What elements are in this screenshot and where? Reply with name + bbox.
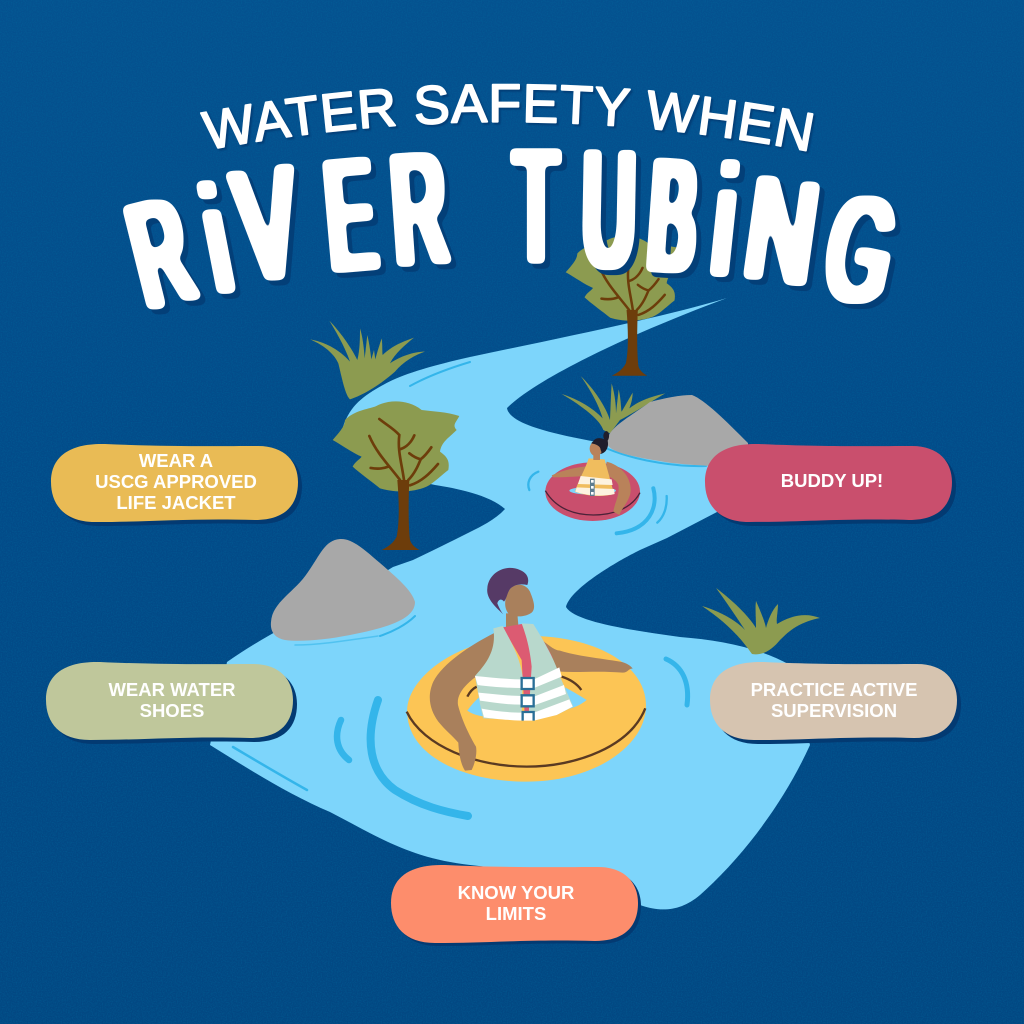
callout: wear a life jacket: USCG APPROVED bbox=[95, 471, 257, 492]
near arm bbox=[430, 633, 495, 771]
ripples around small tuber bbox=[528, 472, 667, 533]
title: river tubing: i bbox=[191, 155, 242, 324]
callout: practice active supervision: SUPERVISION bbox=[771, 700, 897, 721]
grass: upper left bbox=[310, 321, 425, 399]
callout: know your limits: LIMITS bbox=[486, 903, 546, 924]
callout: buddy up bbox=[705, 444, 956, 526]
grass: right bank bbox=[702, 588, 820, 654]
tree: upper right bbox=[566, 236, 685, 376]
title: river tubing: T bbox=[514, 118, 558, 296]
callout: wear a life jacket: LIFE JACKET bbox=[116, 492, 236, 513]
hair front bbox=[591, 440, 604, 453]
right arm bbox=[605, 462, 631, 515]
title: water safety when: WATER SAFETY WHEN bbox=[200, 84, 816, 154]
title: river tubing: R bbox=[387, 119, 452, 298]
hair back and bun bbox=[593, 431, 609, 454]
life vest bbox=[575, 458, 614, 496]
tube hole bbox=[569, 487, 616, 495]
hair bbox=[487, 568, 528, 615]
callout: wear water shoes bbox=[46, 662, 297, 744]
callout: wear a life jacket: WEAR A bbox=[139, 450, 213, 471]
callout: wear water shoes: WEAR WATER bbox=[108, 679, 236, 700]
river bbox=[210, 298, 810, 909]
rock: large left bbox=[271, 539, 415, 641]
title: river tubing: i bbox=[706, 134, 743, 308]
rock: small right bbox=[607, 395, 748, 470]
tube hole: right sliver bbox=[565, 687, 587, 709]
title: river tubing: G bbox=[813, 164, 908, 337]
title: river tubing: E bbox=[319, 125, 381, 304]
head bbox=[505, 585, 534, 616]
title: river tubing: N bbox=[737, 146, 826, 315]
title: river tubing: R bbox=[115, 166, 206, 339]
tube hole: left sliver bbox=[467, 697, 485, 717]
title: river tubing bbox=[115, 116, 908, 339]
yellow tube bbox=[407, 636, 646, 782]
title: river tubing: U bbox=[581, 116, 637, 301]
callout: practice active supervision bbox=[710, 662, 961, 744]
neck and shirt bbox=[506, 613, 518, 627]
callout: wear water shoes: SHOES bbox=[140, 700, 204, 721]
tree: left bank bbox=[333, 401, 459, 550]
callout: know your limits: KNOW YOUR bbox=[458, 882, 574, 903]
title: river tubing: V bbox=[226, 133, 309, 314]
callout: know your limits bbox=[391, 865, 641, 946]
left arm bbox=[552, 466, 588, 477]
callout: practice active supervision: PRACTICE ACTIVE bbox=[751, 679, 917, 700]
life vest bbox=[475, 623, 573, 721]
small tuber on red tube bbox=[528, 431, 667, 533]
river ripple lines bbox=[233, 362, 706, 816]
tube seam bbox=[407, 708, 645, 767]
title: river tubing: B bbox=[644, 125, 702, 306]
callout: wear a life jacket bbox=[51, 444, 302, 526]
grass: behind small rock bbox=[562, 376, 665, 433]
main tuber on yellow tube bbox=[407, 568, 646, 782]
red tube bbox=[545, 462, 640, 521]
neck and head bbox=[593, 450, 600, 460]
far arm bbox=[540, 638, 633, 673]
callout: buddy up: BUDDY UP! bbox=[781, 470, 883, 491]
